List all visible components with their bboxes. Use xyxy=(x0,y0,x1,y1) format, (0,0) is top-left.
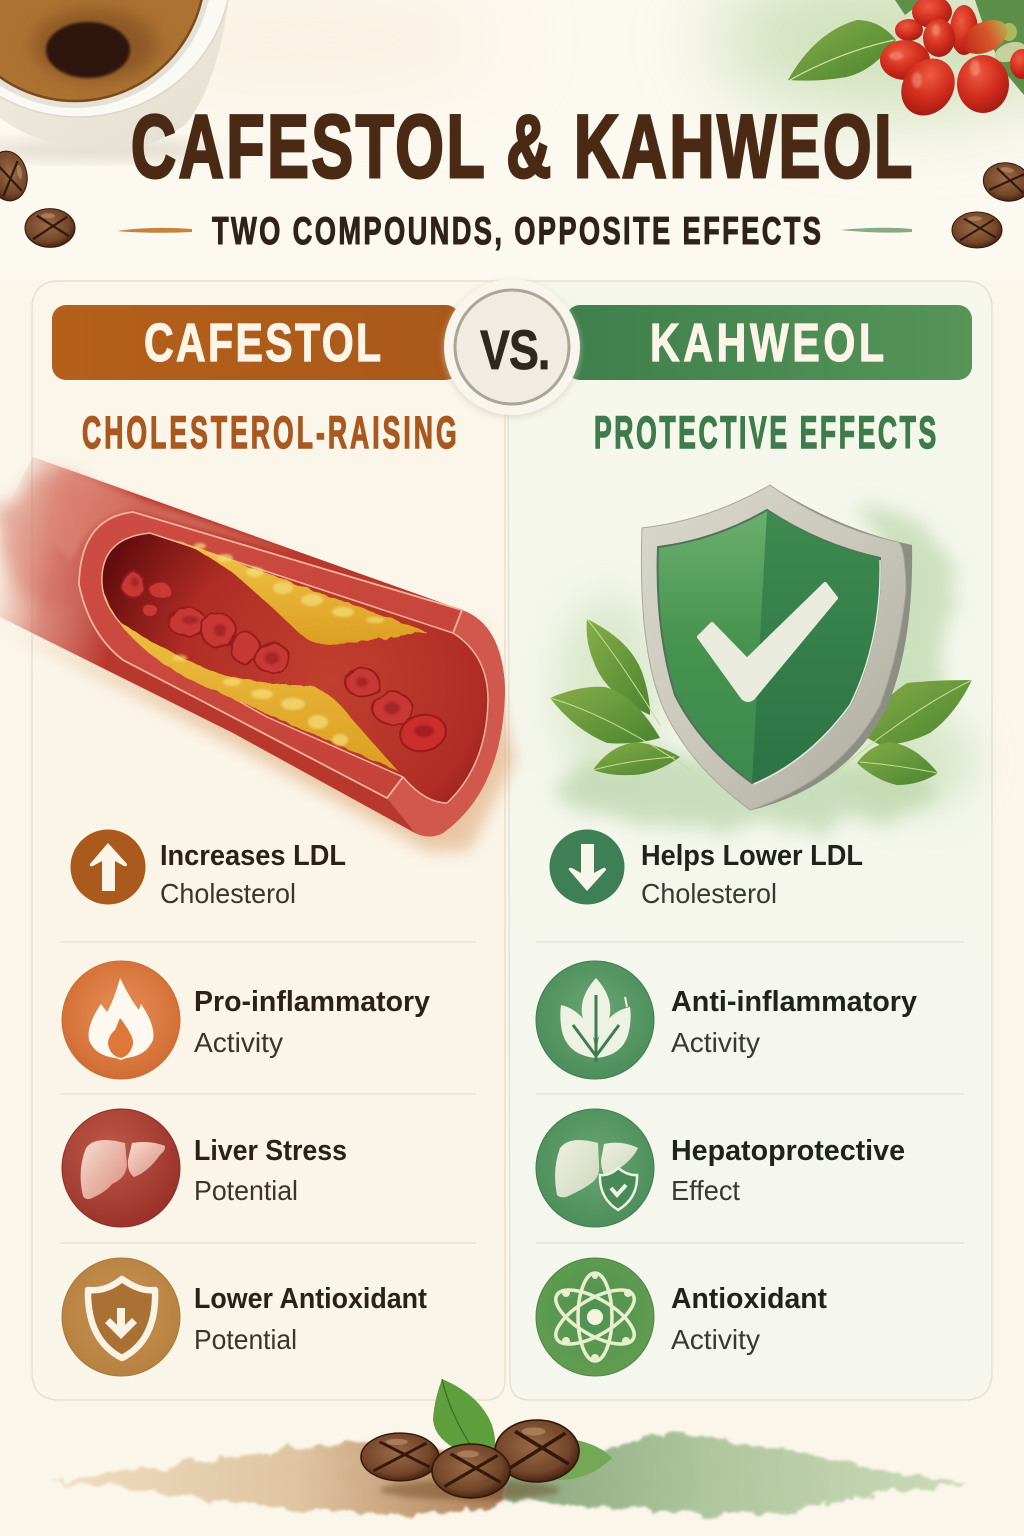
scattered coffee beans xyxy=(0,148,1024,248)
row: pro-inflammatory xyxy=(62,961,430,1079)
check mark xyxy=(699,584,836,700)
row: lower antioxidant: Potential xyxy=(194,1324,297,1355)
subheading: cholesterol-raising: CHOLESTEROL-RAISING xyxy=(82,408,457,458)
header: kahweol xyxy=(566,305,972,380)
row: liver stress: Potential xyxy=(194,1175,298,1206)
header: kahweol: KAHWEOL xyxy=(650,314,884,373)
row: pro-inflammatory: Activity xyxy=(194,1027,283,1058)
row: liver stress xyxy=(62,1109,347,1227)
coffee cup xyxy=(0,0,231,160)
row: hepatoprotective xyxy=(536,1109,905,1227)
row: lower antioxidant xyxy=(62,1258,427,1376)
row: increases LDL: Increases LDL xyxy=(160,840,346,872)
icon: atom xyxy=(536,1258,654,1376)
ground wash xyxy=(49,1432,968,1516)
right leaves xyxy=(830,680,972,785)
vessel interior wall xyxy=(387,610,505,836)
header: cafestol: CAFESTOL xyxy=(144,314,381,373)
cholesterol plaque xyxy=(102,538,427,771)
VS badge: VS. xyxy=(480,318,550,381)
shield face xyxy=(658,510,880,783)
row: pro-inflammatory: Pro-inflammatory xyxy=(194,986,430,1018)
bottom coffee beans and leaves xyxy=(361,1379,612,1500)
row: increases LDL xyxy=(70,830,346,909)
row: antioxidant: Activity xyxy=(671,1324,760,1355)
green wash xyxy=(555,510,975,830)
row: antioxidant xyxy=(536,1258,827,1376)
row: helps lower LDL xyxy=(550,830,863,909)
icon: shield with down arrow xyxy=(62,1258,180,1376)
VS badge xyxy=(443,279,581,418)
row: anti-inflammatory xyxy=(536,961,917,1079)
icon: liver with shield xyxy=(536,1109,654,1227)
title: CAFESTOL & KAHWEOL xyxy=(131,97,912,197)
header: cafestol xyxy=(52,305,460,380)
row: helps lower LDL: Helps Lower LDL xyxy=(641,840,863,872)
subtitle: TWO COMPOUNDS, OPPOSITE EFFECTS xyxy=(212,210,821,253)
row: liver stress: Liver Stress xyxy=(194,1135,347,1167)
row: hepatoprotective: Effect xyxy=(671,1175,740,1206)
row: increases LDL: Cholesterol xyxy=(160,878,296,909)
icon: down arrow xyxy=(550,830,624,904)
panel: kahweol xyxy=(508,281,992,1400)
panel: cafestol xyxy=(32,281,505,1400)
icon: up arrow xyxy=(70,830,146,904)
row: antioxidant: Antioxidant xyxy=(671,1283,827,1315)
icon: liver xyxy=(62,1109,180,1227)
artery illustration xyxy=(0,457,515,852)
row: anti-inflammatory: Anti-inflammatory xyxy=(671,986,917,1018)
shield frame xyxy=(641,485,912,810)
shield illustration xyxy=(550,485,975,830)
berries and leaf xyxy=(788,0,1024,126)
icon: plant leaves xyxy=(536,961,654,1079)
left leaves xyxy=(550,619,690,775)
row: anti-inflammatory: Activity xyxy=(671,1027,760,1058)
subheading: protective effects: PROTECTIVE EFFECTS xyxy=(594,408,936,458)
red blood cells xyxy=(122,572,412,724)
row: hepatoprotective: Hepatoprotective xyxy=(671,1135,905,1167)
icon: flame xyxy=(62,961,180,1079)
row: lower antioxidant: Lower Antioxidant xyxy=(194,1283,427,1315)
row: helps lower LDL: Cholesterol xyxy=(641,878,777,909)
